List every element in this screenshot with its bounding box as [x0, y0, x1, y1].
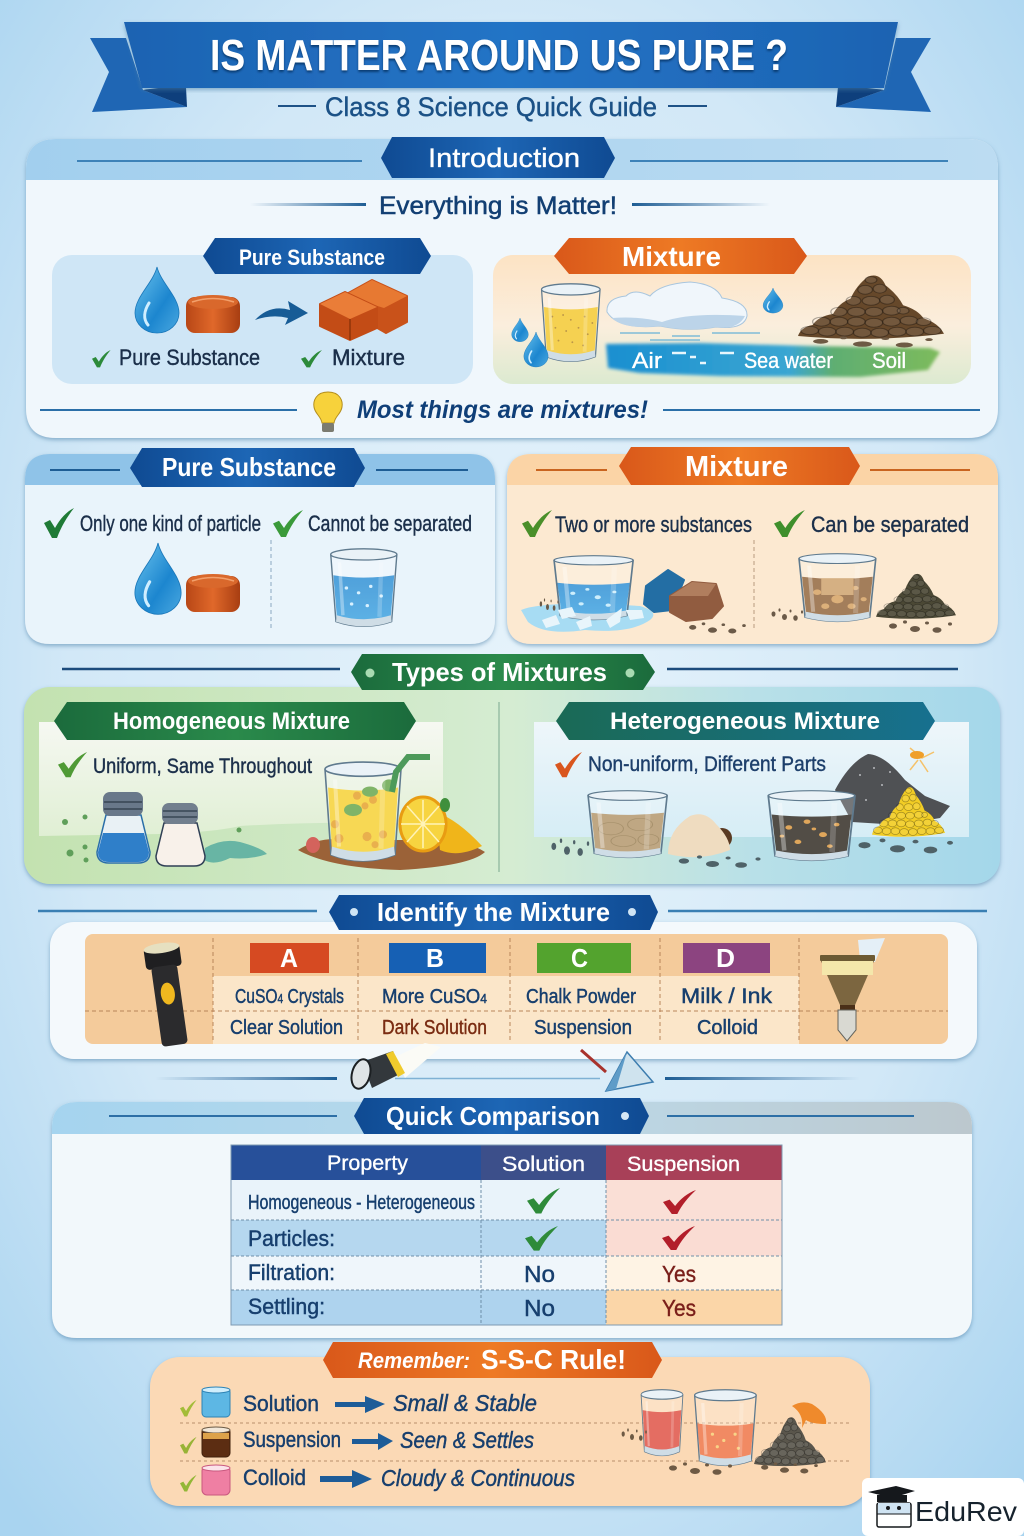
option D: Milk / Ink: [681, 985, 773, 1008]
icon: glass of water: [331, 549, 397, 626]
option D: D: [716, 943, 735, 973]
heading: pure substance: [130, 448, 365, 487]
panel: mixture summary: [493, 238, 971, 384]
row: particles: Particles:: [248, 1226, 335, 1251]
point: uniform: Uniform, Same Throughout: [93, 755, 312, 778]
icon: glass of muddy water: [799, 554, 876, 622]
icon: sun splash: [910, 748, 934, 772]
point: uniform: [58, 752, 312, 778]
panel: heterogeneous mixture: [534, 702, 969, 868]
icon: red leaf: [306, 837, 320, 853]
row: suspension: Seen & Settles: [400, 1427, 534, 1453]
row: solution: Small & Stable: [393, 1390, 537, 1416]
icon: green splash: [204, 841, 267, 863]
row: solution: [180, 1387, 537, 1417]
label: soil: Soil: [872, 348, 906, 373]
panel: mixture: [507, 447, 998, 644]
label: air: Air: [632, 348, 662, 373]
title text: IS MATTER AROUND US PURE ?: [210, 31, 788, 80]
icon: funnel: [820, 938, 885, 1041]
option B: B: [426, 943, 444, 973]
option C: [526, 943, 636, 1039]
option C: C: [571, 943, 588, 973]
row: settling: Yes: [662, 1295, 696, 1321]
arrow: [255, 301, 308, 325]
water and land band: [606, 333, 940, 377]
logo: edurev: EduRev: [915, 1496, 1017, 1527]
heading: mixture: Mixture: [622, 241, 721, 272]
row: suspension: [180, 1427, 534, 1457]
table header: [231, 1145, 782, 1180]
title banner: [90, 22, 931, 112]
option A: Clear Solution: [230, 1017, 343, 1039]
option B: [382, 943, 487, 1039]
label: sea water: Sea water: [744, 348, 833, 373]
option B: Dark Solution: [382, 1017, 487, 1039]
icon: water drop: [135, 543, 181, 614]
point: cannot be separated: [273, 510, 472, 537]
heading: mixture: [619, 447, 860, 485]
point: only one kind of particle: [44, 508, 261, 538]
icon: dark soil pile: [876, 574, 956, 619]
icon: water spill: [521, 604, 653, 632]
icon: large orange glass: [695, 1390, 756, 1465]
text: everything is matter: [250, 192, 770, 220]
callout: most things are mixtures: [40, 392, 980, 432]
row: filtration: [231, 1256, 782, 1290]
panel: homogeneous mixture: [39, 702, 485, 870]
icon: water drop: [135, 267, 179, 333]
icon: sand pile: [668, 814, 732, 857]
option A: A: [280, 943, 298, 973]
option C: Suspension: [534, 1017, 632, 1039]
heading: remember: S-S-C Rule!: [481, 1344, 626, 1375]
option A: CuSO4 Crystals: [235, 986, 344, 1008]
heading: pure substance: Pure Substance: [162, 452, 336, 482]
icon: rock pile: [754, 1417, 826, 1466]
icon: cloud: [607, 282, 747, 329]
icon: yellow pile: [872, 787, 945, 837]
panel: quick comparison: [52, 1098, 972, 1338]
callout: most things are mixtures: Most things are mixtures!: [357, 396, 648, 424]
panel: pure substance summary: [52, 238, 473, 384]
heading: quick comparison: Quick Comparison: [386, 1101, 600, 1131]
check: pure substance: Pure Substance: [119, 345, 260, 370]
icon: juice glass: [542, 284, 600, 361]
icon: ice chunks: [542, 607, 644, 630]
icon: white salt shaker: [156, 803, 205, 866]
icon: graduation cap and face: [868, 1486, 915, 1527]
row: homogeneous: [231, 1180, 782, 1220]
row: settling: [231, 1290, 782, 1325]
subtitle: Class 8 Science Quick Guide: [325, 92, 657, 122]
point: non-uniform: Non-uniform, Different Parts: [588, 753, 826, 776]
comparison table: [231, 1145, 782, 1325]
panel: introduction: [26, 137, 998, 438]
icon: light bulb: [314, 392, 342, 432]
heading: introduction: [381, 137, 615, 178]
icon: blue salt shaker: [97, 792, 150, 863]
icon: grey rock pile: [835, 754, 950, 825]
point: can be separated: Can be separated: [811, 512, 969, 537]
logo: edurev: [862, 1478, 1024, 1536]
table header: Property: [327, 1152, 409, 1175]
heading: homogeneous mixture: [54, 702, 416, 740]
panel: types of mixtures: [24, 687, 1000, 884]
option A: [230, 943, 344, 1039]
icon: small cone flask: [581, 1050, 653, 1091]
option D: [681, 943, 773, 1039]
panel: pure substance: [25, 448, 495, 644]
check: mixture: Mixture: [332, 345, 405, 370]
icon: small drops: [512, 288, 783, 367]
icon: copper bricks: [320, 280, 407, 340]
option D: Colloid: [697, 1017, 758, 1039]
option B: More CuSO4: [382, 986, 487, 1008]
icon: flashlight: [143, 941, 193, 1048]
icon: soil crumbs: [813, 336, 933, 348]
row: homogeneous: Homogeneous - Heterogeneous: [248, 1192, 475, 1214]
heading: identify the mixture: [38, 895, 987, 930]
heading: quick comparison: [354, 1098, 649, 1134]
icon: copper cylinder: [186, 574, 240, 612]
heading: types of mixtures: [62, 654, 958, 690]
point: two or more substances: Two or more substances: [555, 512, 752, 537]
icon: copper cylinder: [186, 295, 240, 333]
icon: dark beaker: [768, 791, 855, 861]
row: colloid: Cloudy & Continuous: [381, 1465, 575, 1491]
text: everything is matter: Everything is Matter!: [379, 192, 617, 220]
panel: identify the mixture: [50, 922, 977, 1059]
row: filtration: Yes: [662, 1261, 696, 1287]
heading: introduction: Introduction: [428, 143, 580, 173]
panel: remember rule: [150, 1342, 870, 1506]
table header: Suspension: [627, 1153, 740, 1176]
icon: blue and brown blocks: [644, 570, 723, 621]
heading: heterogeneous mixture: [556, 702, 935, 740]
icon: crumbs: [540, 598, 952, 634]
point: only one kind of particle: Only one kind of particle: [80, 511, 261, 536]
heading: remember: Remember:: [358, 1348, 470, 1373]
heading: identify the mixture: Identify the Mixture: [377, 897, 610, 927]
icon: small flashlight: [348, 1043, 441, 1091]
icon: wooden board: [298, 839, 485, 870]
point: two or more substances: [522, 510, 752, 537]
heading: pure substance: Pure Substance: [239, 245, 385, 270]
icon: red glass: [641, 1390, 683, 1456]
option C: Chalk Powder: [526, 986, 636, 1008]
row: suspension: Suspension: [243, 1427, 341, 1452]
point: can be separated: [774, 510, 969, 537]
heading: heterogeneous mixture: Heterogeneous Mixture: [610, 708, 880, 735]
icon: orange splash: [792, 1402, 826, 1428]
check: mixture: [301, 345, 405, 370]
point: cannot be separated: Cannot be separated: [308, 511, 472, 536]
heading: pure substance: [203, 238, 431, 274]
icon: beaker with ice: [554, 556, 633, 620]
divider lines: [155, 1077, 860, 1080]
heading: types of mixtures: Types of Mixtures: [392, 657, 607, 687]
row: colloid: Colloid: [243, 1465, 306, 1490]
row: settling: Settling:: [248, 1294, 325, 1319]
icon: crumbs: [622, 1428, 818, 1475]
row: colloid: [180, 1465, 575, 1495]
icon: crumbs: [551, 838, 953, 868]
row: filtration: No: [524, 1261, 555, 1287]
icon: soil pile: [798, 276, 944, 339]
heading: remember: [323, 1342, 662, 1378]
icon: sandy beaker: [588, 791, 667, 858]
row: settling: No: [524, 1295, 555, 1321]
row: solution: Solution: [243, 1391, 319, 1416]
table header: Solution: [502, 1153, 585, 1176]
heading: mixture: Mixture: [685, 451, 788, 483]
heading: mixture: [554, 238, 807, 274]
icon: lemon slices: [400, 797, 482, 853]
row: particles: [231, 1220, 782, 1256]
row: filtration: Filtration:: [248, 1260, 335, 1285]
heading: homogeneous mixture: Homogeneous Mixture: [113, 708, 350, 735]
icon: lemonade glass: [325, 757, 430, 861]
